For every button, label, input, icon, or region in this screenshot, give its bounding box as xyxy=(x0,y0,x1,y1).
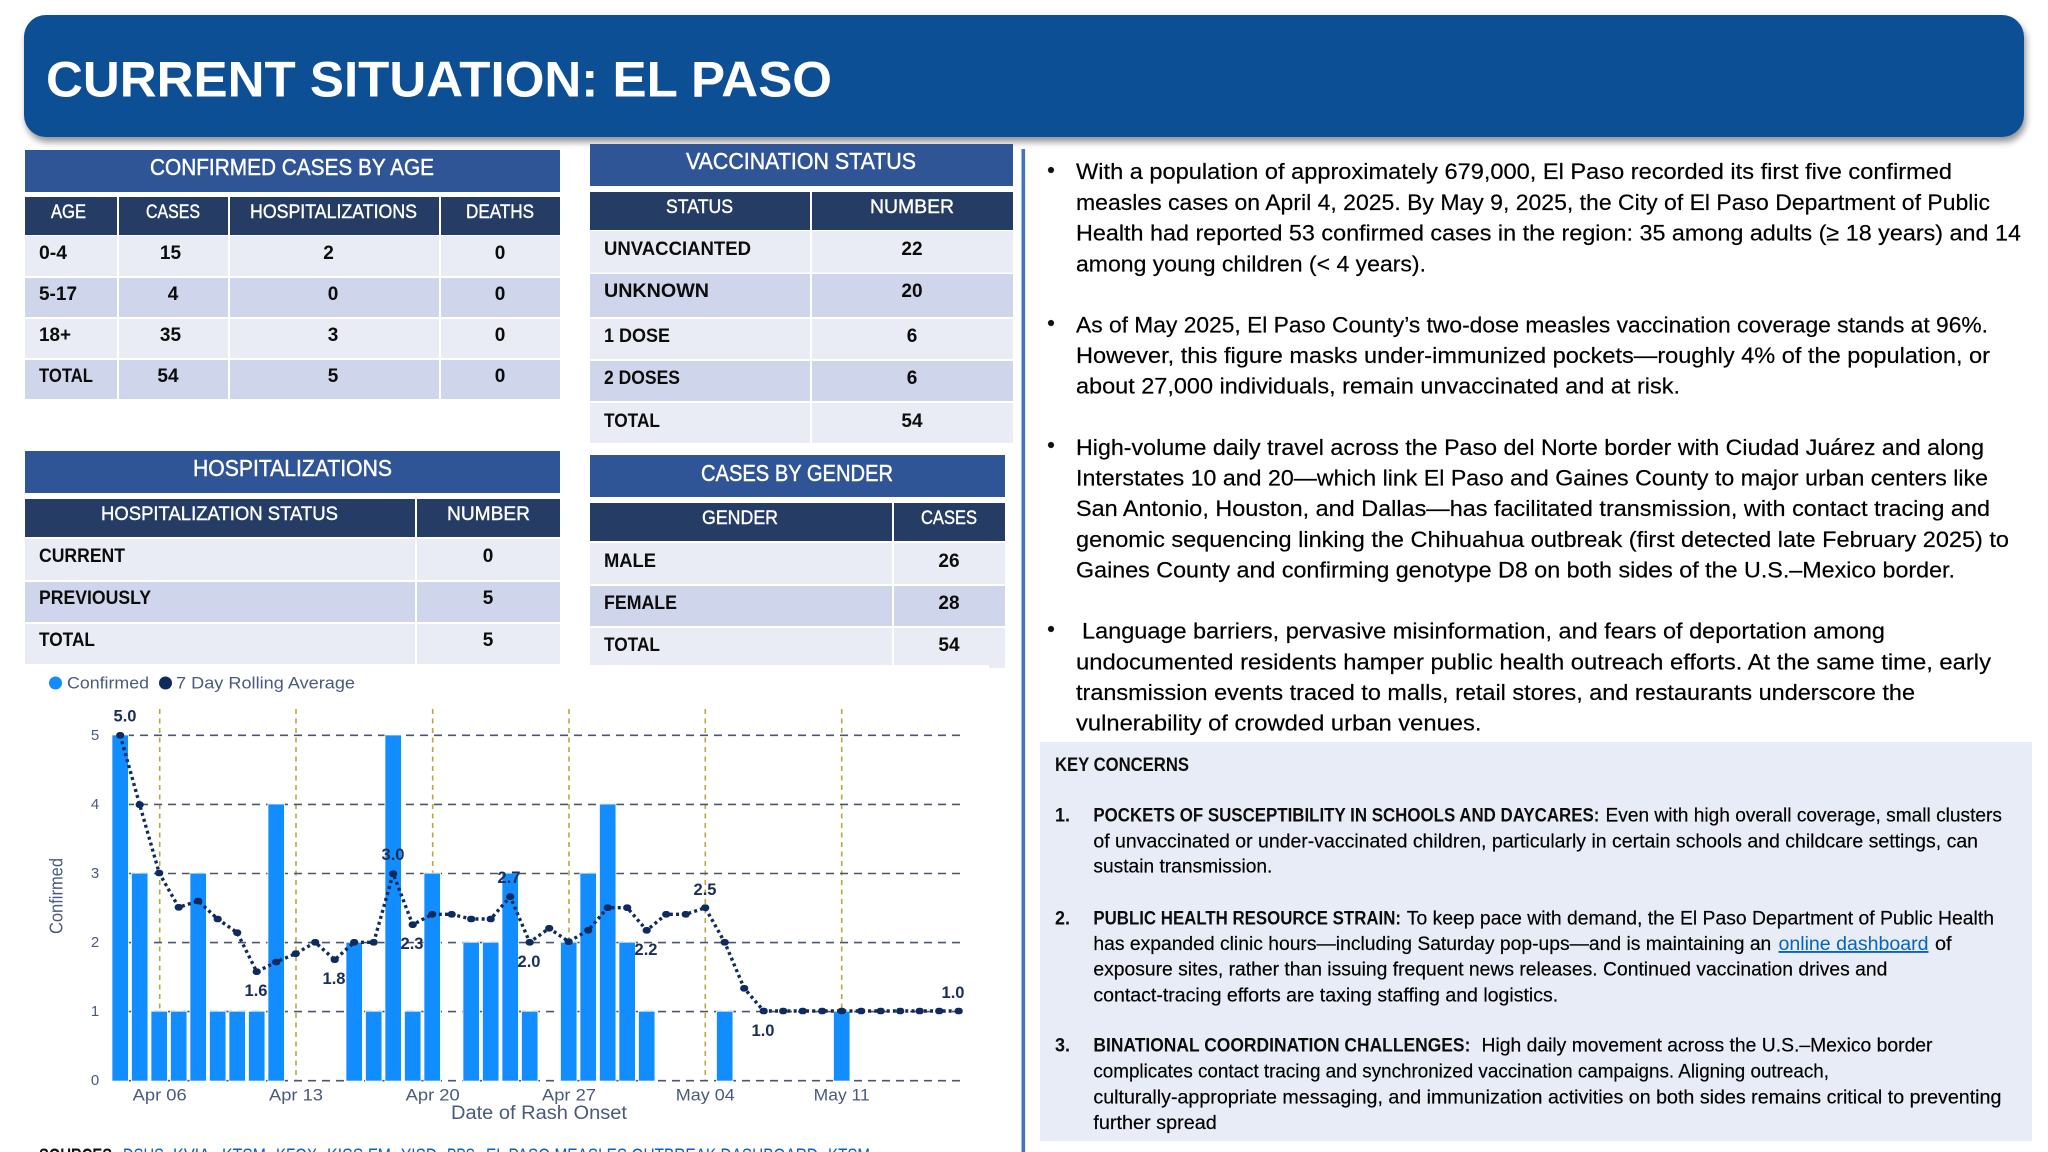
row total xyxy=(590,628,1005,668)
row female: FEMALE xyxy=(604,593,677,614)
bullet 3 xyxy=(1048,435,2009,582)
row previously xyxy=(25,582,560,622)
concern 1: POCKETS OF SUSCEPTIBILITY IN SCHOOLS AND DAYCARES: xyxy=(1093,806,1599,827)
concern 3: BINATIONAL COORDINATION CHALLENGES: xyxy=(1093,1036,1470,1057)
table heading: CONFIRMED CASES BY AGE xyxy=(150,154,434,180)
data labels: 3.0 xyxy=(382,846,404,864)
table heading: HOSPITALIZATIONS xyxy=(193,455,392,481)
row male: MALE xyxy=(604,551,656,572)
row total: TOTAL xyxy=(604,411,660,432)
row 0-4 xyxy=(25,236,560,276)
row previously: 5 xyxy=(483,588,494,609)
x axis ticks: Apr 13 xyxy=(269,1086,323,1104)
row unknown: UNKNOWN xyxy=(604,281,709,302)
table heading: CASES BY GENDER xyxy=(701,460,893,486)
table heading xyxy=(590,455,1005,497)
data labels: 1.0 xyxy=(942,984,964,1002)
column headers: DEATHS xyxy=(466,201,534,223)
column headers xyxy=(590,192,1013,230)
key concerns heading: KEY CONCERNS xyxy=(1055,755,1189,776)
y axis ticks: 1 xyxy=(91,1003,99,1020)
row previously: PREVIOUSLY xyxy=(39,588,151,609)
row total: 54 xyxy=(938,635,960,656)
concern 3: further spread xyxy=(1093,1113,1217,1134)
row male: 26 xyxy=(938,551,960,572)
bullet 3: High-volume daily travel across the Paso del Norte border with Ciudad Juárez and along xyxy=(1076,435,1984,460)
data labels: 2.2 xyxy=(635,941,657,959)
concern 2 xyxy=(1055,908,1994,1007)
column headers: STATUS xyxy=(666,196,733,218)
bullet 4: vulnerability of crowded urban venues. xyxy=(1076,710,1482,736)
x axis ticks: Apr 06 xyxy=(133,1086,187,1104)
bullet 3: San Antonio, Houston, and Dallas—has facilitated transmission, with contact tracing and xyxy=(1076,496,1990,521)
y axis ticks: 0 xyxy=(91,1072,99,1089)
bullet 3: Gaines County and confirming genotype D8 on both sides of the U.S.–Mexico border. xyxy=(1076,557,1955,582)
bullet 1: measles cases on April 4, 2025. By May 9, 2025, the City of El Paso Department of Public xyxy=(1076,190,1990,215)
concern 3: complicates contact tracing and synchronized vaccination campaigns. Aligning outreach, xyxy=(1093,1062,1829,1083)
row 5-17: 0 xyxy=(495,284,505,305)
bullet 4: Language barriers, pervasive misinformation, and fears of deportation among xyxy=(1082,619,1885,644)
concern 2: PUBLIC HEALTH RESOURCE STRAIN: xyxy=(1093,908,1401,929)
row total: 54 xyxy=(157,366,179,387)
row 5-17: 4 xyxy=(168,284,179,305)
chart legend xyxy=(49,674,355,692)
bullet 2 xyxy=(1048,312,1991,399)
bullet 2: As of May 2025, El Paso County’s two-dose measles vaccination coverage stands at 96%. xyxy=(1076,312,1988,338)
row 18+ xyxy=(25,319,560,358)
row 1 dose: 1 DOSE xyxy=(604,326,670,347)
x axis ticks: Apr 27 xyxy=(542,1086,596,1104)
data labels: 2.5 xyxy=(694,881,716,899)
row current: CURRENT xyxy=(39,546,125,567)
column headers: AGE xyxy=(51,201,86,223)
concern 2: of xyxy=(1935,934,1952,955)
bullet 3: genomic sequencing linking the Chihuahua outbreak (first detected late February 2025) to xyxy=(1076,527,2009,552)
y axis ticks: 2 xyxy=(91,934,99,951)
table heading xyxy=(25,451,560,493)
data labels xyxy=(114,708,964,1040)
concern 1: sustain transmission. xyxy=(1093,857,1272,878)
bullet 1 xyxy=(1048,159,2021,276)
row 5-17: 5-17 xyxy=(39,284,77,305)
concern 2: online dashboard xyxy=(1778,934,1928,955)
bullet 1: Health had reported 53 confirmed cases in the region: 35 among adults (≥ 18 years) and 14 xyxy=(1076,221,2021,246)
row unvaccinated: UNVACCIANTED xyxy=(604,239,751,260)
x axis ticks: May 11 xyxy=(814,1086,870,1104)
data labels: 2.3 xyxy=(401,935,423,953)
row unvaccinated xyxy=(590,231,1013,272)
bullet 2: about 27,000 individuals, remain unvaccinated and at risk. xyxy=(1076,374,1680,399)
concern 1: 1. xyxy=(1055,806,1070,827)
bullet 1: among young children (< 4 years). xyxy=(1076,251,1426,276)
concern 3: 3. xyxy=(1055,1036,1070,1057)
row total: TOTAL xyxy=(604,635,660,656)
header banner xyxy=(24,15,2024,137)
row 5-17: 0 xyxy=(328,284,338,305)
row total: TOTAL xyxy=(39,366,93,387)
x axis title: Date of Rash Onset xyxy=(451,1103,628,1124)
row 2 doses: 2 DOSES xyxy=(604,368,680,389)
column headers: CASES xyxy=(921,507,977,529)
concern 1: Even with high overall coverage, small clusters xyxy=(1606,806,2002,827)
table heading xyxy=(590,144,1013,186)
row total: TOTAL xyxy=(39,630,95,651)
row 0-4: 0-4 xyxy=(39,243,67,264)
table: confirmed cases by age xyxy=(25,150,560,399)
concern 2: 2. xyxy=(1055,908,1070,929)
concern 2: contact-tracing efforts are taxing staffing and logistics. xyxy=(1093,986,1558,1007)
data labels: 1.0 xyxy=(752,1022,774,1040)
data labels: 5.0 xyxy=(114,708,136,726)
y axis ticks: 4 xyxy=(91,796,99,813)
table: vaccination status xyxy=(590,144,1013,443)
row 1 dose xyxy=(590,319,1013,359)
x axis ticks: Apr 20 xyxy=(406,1086,460,1104)
row 0-4: 15 xyxy=(160,243,181,264)
row 18+: 3 xyxy=(328,325,338,346)
data labels: 1.6 xyxy=(245,982,267,1000)
column headers: NUMBER xyxy=(447,503,530,525)
bullet 4 xyxy=(1048,619,1992,736)
concern 2: exposure sites, rather than issuing frequent news releases. Continued vaccination drives and xyxy=(1093,960,1887,981)
concern 3: culturally-appropriate messaging, and immunization activities on both sides remains critical to preventing xyxy=(1093,1087,2001,1108)
column headers: HOSPITALIZATIONS xyxy=(250,201,417,223)
concern 2: has expanded clinic hours—including Saturday pop-ups—and is maintaining an xyxy=(1093,934,1771,955)
chart legend: 7 Day Rolling Average xyxy=(176,674,355,692)
y axis ticks: 3 xyxy=(91,865,99,882)
row 18+: 18+ xyxy=(39,325,71,346)
row unknown xyxy=(590,274,1013,317)
row total xyxy=(25,360,560,399)
bullet 1: With a population of approximately 679,000, El Paso recorded its first five confirmed xyxy=(1076,159,1952,184)
row 18+: 35 xyxy=(160,325,181,346)
panel: key concerns xyxy=(1040,742,2032,1141)
row 1 dose: 6 xyxy=(907,326,917,347)
row female: 28 xyxy=(938,593,960,614)
vertical divider xyxy=(1022,149,1025,1152)
row 18+: 0 xyxy=(495,325,505,346)
concern 2: To keep pace with demand, the El Paso Department of Public Health xyxy=(1407,908,1994,929)
title: CURRENT SITUATION: EL PASO xyxy=(46,52,832,108)
concern 1 xyxy=(1055,806,2002,878)
bullet 4: undocumented residents hamper public health outreach efforts. At the same time, early xyxy=(1076,649,1992,674)
data labels: 2.7 xyxy=(498,869,520,887)
bars: confirmed cases per day xyxy=(112,735,850,1081)
column headers: GENDER xyxy=(702,507,778,529)
x axis ticks: May 04 xyxy=(676,1086,735,1104)
column headers: NUMBER xyxy=(870,196,954,218)
column headers xyxy=(590,503,1005,541)
bullet 4: transmission events traced to malls, retail stores, and restaurants underscore the xyxy=(1076,680,1915,705)
row total: 5 xyxy=(483,630,494,651)
column headers: HOSPITALIZATION STATUS xyxy=(101,503,338,525)
column headers: CASES xyxy=(146,201,200,223)
table heading xyxy=(25,150,560,192)
row male xyxy=(590,543,1005,584)
row total: 54 xyxy=(901,411,923,432)
table: cases by gender xyxy=(590,455,1005,668)
row current xyxy=(25,539,560,580)
row total xyxy=(590,403,1013,443)
data labels: 1.8 xyxy=(323,970,345,988)
row 5-17 xyxy=(25,278,560,317)
row 0-4: 0 xyxy=(495,243,505,264)
column headers xyxy=(25,499,560,537)
row unknown: 20 xyxy=(901,281,923,302)
bullet 3: Interstates 10 and 20—which link El Paso and Gaines County to major urban centers like xyxy=(1076,466,1988,491)
data labels: 2.0 xyxy=(518,953,540,971)
row total xyxy=(25,624,560,664)
x axis ticks xyxy=(133,1086,870,1104)
row 0-4: 2 xyxy=(323,243,334,264)
chart legend: Confirmed xyxy=(67,674,149,692)
bullet 2: However, this figure masks under-immunized pockets—roughly 4% of the population, or xyxy=(1076,343,1991,368)
row unvaccinated: 22 xyxy=(901,239,923,260)
y axis ticks: 5 xyxy=(91,727,99,744)
row 2 doses xyxy=(590,361,1013,401)
column headers xyxy=(25,197,560,235)
y axis ticks xyxy=(91,727,99,1089)
table heading: VACCINATION STATUS xyxy=(686,148,916,174)
row total: 0 xyxy=(495,366,505,387)
chart: confirmed cases by date of rash onset xyxy=(46,674,966,1124)
concern 3: High daily movement across the U.S.–Mexico border xyxy=(1482,1036,1933,1057)
situation bullets xyxy=(1048,159,2021,736)
y axis title: Confirmed xyxy=(46,858,66,934)
concern 3 xyxy=(1055,1036,2001,1134)
row female xyxy=(590,586,1005,626)
concern 1: of unvaccinated or under-vaccinated children, particularly in certain schools and childcare settings, can xyxy=(1093,831,1978,852)
row total: 5 xyxy=(328,366,339,387)
row current: 0 xyxy=(483,546,493,567)
sources line xyxy=(39,1146,870,1152)
line: 7 day rolling average xyxy=(119,735,959,1011)
table: hospitalizations xyxy=(25,451,560,664)
row 2 doses: 6 xyxy=(907,368,917,389)
